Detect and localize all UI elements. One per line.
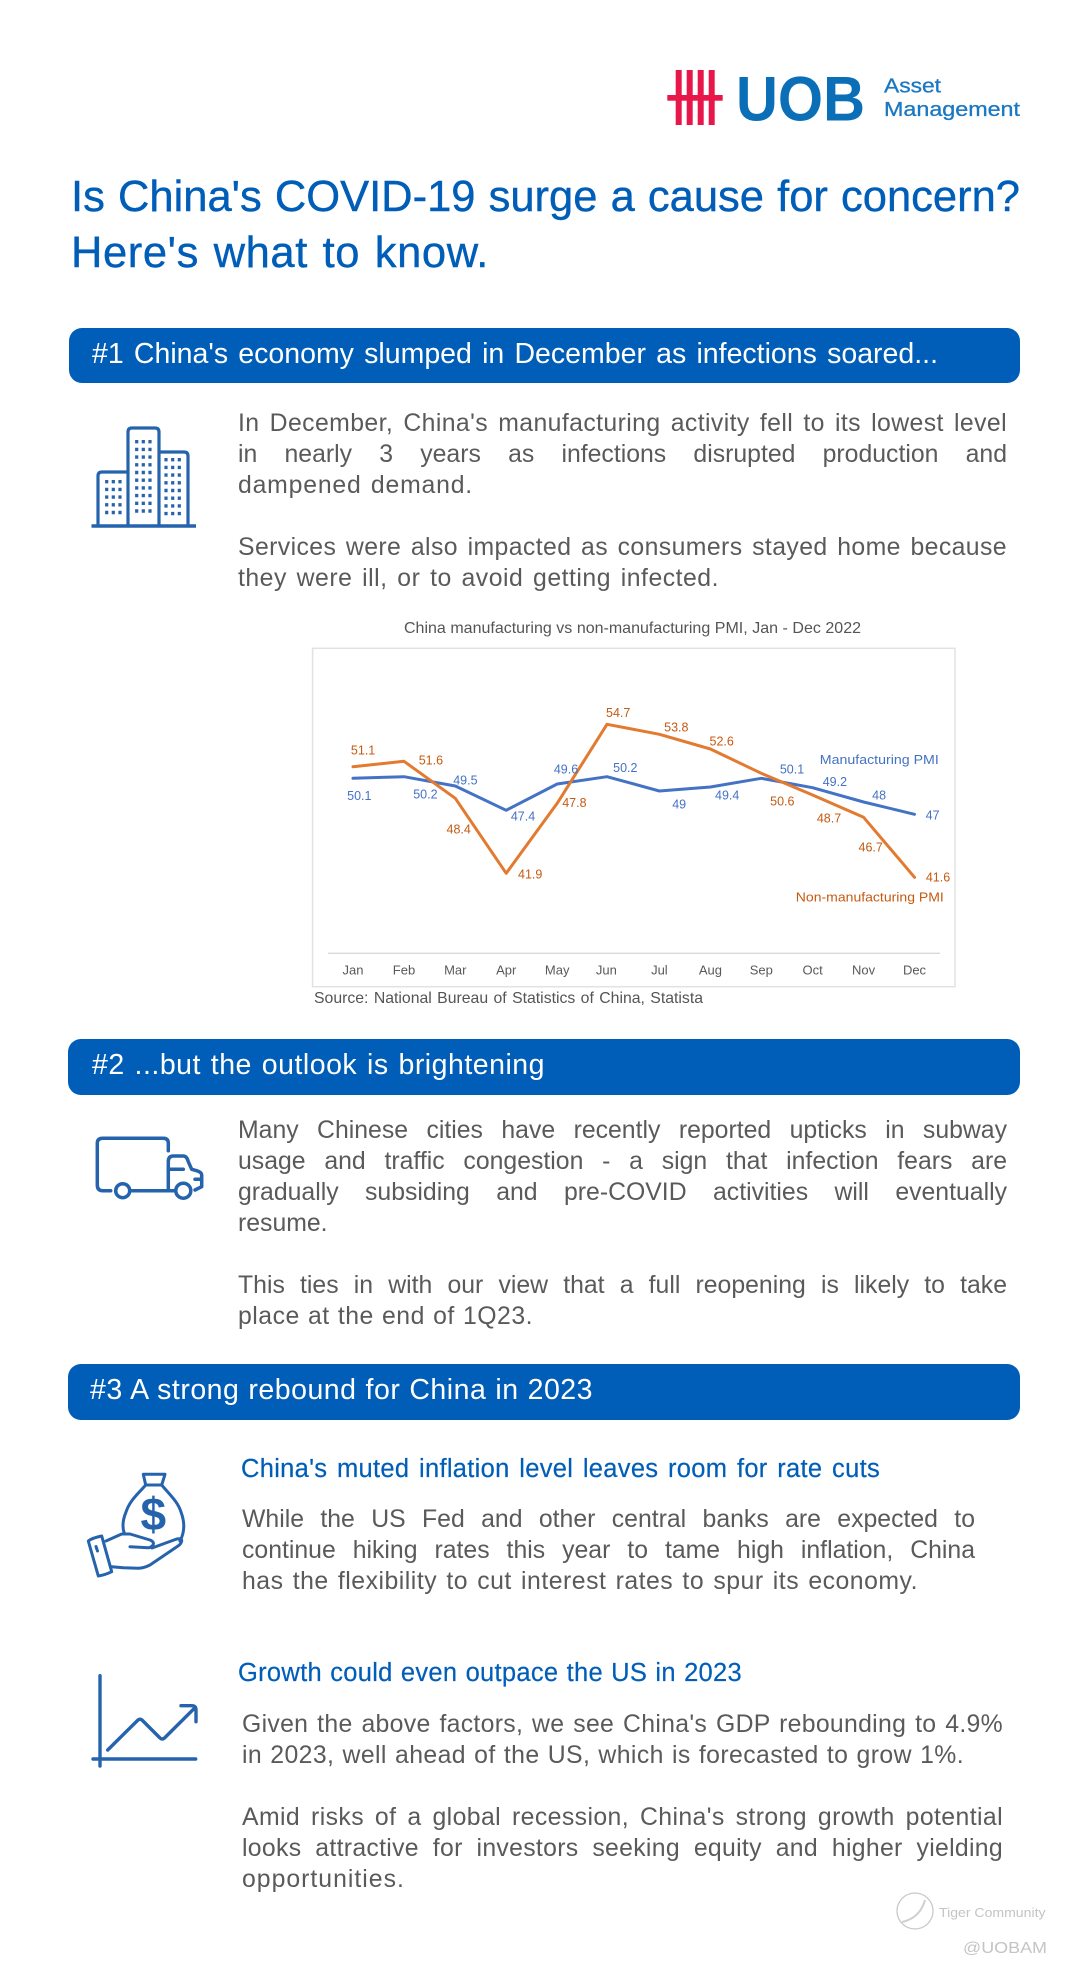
labels: non-manufacturing values: 46.7 <box>859 841 883 855</box>
x axis months: Mar <box>444 962 467 978</box>
text block: rate cuts paragraph: has the flexibility to cut interest rates to spur its economy. <box>242 1568 918 1595</box>
labels: manufacturing values: 49.6 <box>554 763 578 777</box>
labels: non-manufacturing values: 41.6 <box>926 871 950 885</box>
labels: manufacturing values: 50.1 <box>780 763 804 777</box>
labels: non-manufacturing values: 41.9 <box>518 867 542 881</box>
x axis months <box>343 962 927 978</box>
labels: non-manufacturing values: 52.6 <box>710 735 734 749</box>
labels: non-manufacturing values: 53.8 <box>664 720 689 734</box>
text block: section 1 paragraphs: Services were also impacted as consumers stayed home because <box>238 534 1007 561</box>
series: non-manufacturing PMI <box>353 724 914 877</box>
labels: manufacturing values: 49.5 <box>453 773 478 787</box>
heading banner #3: #3 A strong rebound for China in 2023 <box>90 1374 593 1406</box>
title: Here's what to know. <box>71 229 489 277</box>
labels: manufacturing values: 48 <box>872 788 886 802</box>
text block: GDP paragraphs: Given the above factors, we see China's GDP rebounding to 4.9% <box>242 1710 1003 1738</box>
text block: section 2 paragraphs: resume. <box>238 1210 328 1236</box>
x axis months: Jan <box>343 962 363 978</box>
x axis months: May <box>545 962 570 978</box>
logo: UOB Asset Management <box>667 64 1021 134</box>
labels: non-manufacturing values: 54.7 <box>606 706 630 720</box>
x axis months: Jun <box>596 962 617 978</box>
icon: buildings <box>92 426 196 528</box>
x axis months: Nov <box>852 962 876 978</box>
labels: manufacturing values: 49.2 <box>823 775 847 789</box>
source note: Source: National Bureau of Statistics of China, Statista <box>314 990 703 1007</box>
labels: manufacturing values: 49.4 <box>715 788 739 802</box>
heading banner #2: #2 ...but the outlook is brightening <box>92 1049 545 1081</box>
x axis months: Apr <box>496 962 517 978</box>
labels: non-manufacturing values: 50.6 <box>770 794 795 808</box>
x axis months: Aug <box>699 962 722 978</box>
heading banner #1 <box>69 328 1020 383</box>
heading banner #2 <box>68 1039 1020 1094</box>
series: manufacturing PMI <box>353 777 914 814</box>
text block: section 2 paragraphs: Many Chinese cities have recently reported upticks in subway <box>238 1116 1007 1144</box>
labels: non-manufacturing values: 47.8 <box>562 796 587 810</box>
x axis months: Feb <box>393 962 415 978</box>
icon: delivery truck <box>96 1136 204 1200</box>
labels: manufacturing values: 50.1 <box>347 789 372 803</box>
labels: non-manufacturing values: 48.7 <box>817 812 841 826</box>
labels: non-manufacturing values <box>351 706 950 885</box>
watermark: Tiger Community: Tiger Community <box>939 1905 1046 1920</box>
x axis months: Oct <box>802 962 823 978</box>
logo: UOB Asset Management: Asset <box>884 76 941 98</box>
text block: GDP paragraphs: opportunities. <box>242 1866 405 1892</box>
text block: section 2 paragraphs: usage and traffic congestion - a sign that infection fears are <box>238 1148 1007 1174</box>
title: Is China's COVID-19 surge a cause for concern? <box>71 173 1020 221</box>
labels: manufacturing values: 50.2 <box>613 761 638 775</box>
x axis months: Jul <box>651 962 668 978</box>
labels: manufacturing values: 50.2 <box>413 788 438 802</box>
x axis months: Dec <box>903 962 927 978</box>
heading banner #1: #1 China's economy slumped in December as infections soared... <box>92 338 938 370</box>
text block: section 2 paragraphs: place at the end of 1Q23. <box>238 1302 533 1330</box>
legend: non-manufacturing PMI: Non-manufacturing PMI <box>796 890 944 904</box>
labels: manufacturing values: 49 <box>672 797 686 811</box>
subheading: inflation: China's muted inflation level leaves room for rate cuts <box>241 1455 880 1483</box>
text block: rate cuts paragraph: While the US Fed and other central banks are expected to <box>242 1506 975 1533</box>
text block: GDP paragraphs: Amid risks of a global recession, China's strong growth potential <box>242 1804 1003 1830</box>
text block: section 2 paragraphs: This ties in with our view that a full reopening is likely to take <box>238 1272 1007 1298</box>
text block: rate cuts paragraph: continue hiking rates this year to tame high inflation, China <box>242 1537 975 1564</box>
text block: section 1 paragraphs <box>238 410 1007 592</box>
labels: manufacturing values: 47 <box>926 808 940 822</box>
text block: GDP paragraphs: looks attractive for investors seeking equity and higher yielding <box>242 1834 1003 1862</box>
text block: GDP paragraphs <box>242 1710 1003 1892</box>
text block: section 1 paragraphs: dampened demand. <box>238 472 473 499</box>
logo: UOB Asset Management: Management <box>884 99 1021 121</box>
subheading: growth: Growth could even outpace the US in 2023 <box>238 1659 742 1687</box>
legend: manufacturing PMI: Manufacturing PMI <box>820 752 939 767</box>
text block: rate cuts paragraph <box>242 1506 976 1595</box>
labels: non-manufacturing values: 51.1 <box>351 744 375 758</box>
labels: manufacturing values <box>347 761 940 823</box>
text block: section 2 paragraphs <box>238 1116 1007 1330</box>
text block: section 1 paragraphs: they were ill, or to avoid getting infected. <box>238 565 719 592</box>
line chart: PMI <box>312 648 956 988</box>
labels: non-manufacturing values: 48.4 <box>447 823 471 837</box>
text block: GDP paragraphs: in 2023, well ahead of the US, which is forecasted to grow 1%. <box>242 1742 964 1768</box>
labels: manufacturing values: 47.4 <box>511 809 535 823</box>
labels: non-manufacturing values: 51.6 <box>419 754 443 768</box>
text block: section 2 paragraphs: gradually subsiding and pre-COVID activities will eventually <box>238 1178 1007 1206</box>
chart title: China manufacturing vs non-manufacturing PMI, Jan - Dec 2022 <box>404 620 861 637</box>
watermark: handle: @UOBAM <box>963 1940 1047 1957</box>
icon: hand holding money bag: $ <box>141 1488 166 1540</box>
logo: UOB Asset Management: UOB <box>736 64 865 134</box>
heading banner #3 <box>68 1364 1020 1420</box>
text block: section 1 paragraphs: In December, China's manufacturing activity fell to its lowest level <box>238 410 1007 437</box>
title <box>71 173 1020 277</box>
text block: section 1 paragraphs: in nearly 3 years as infections disrupted production and <box>238 441 1007 468</box>
x axis months: Sep <box>750 962 773 978</box>
